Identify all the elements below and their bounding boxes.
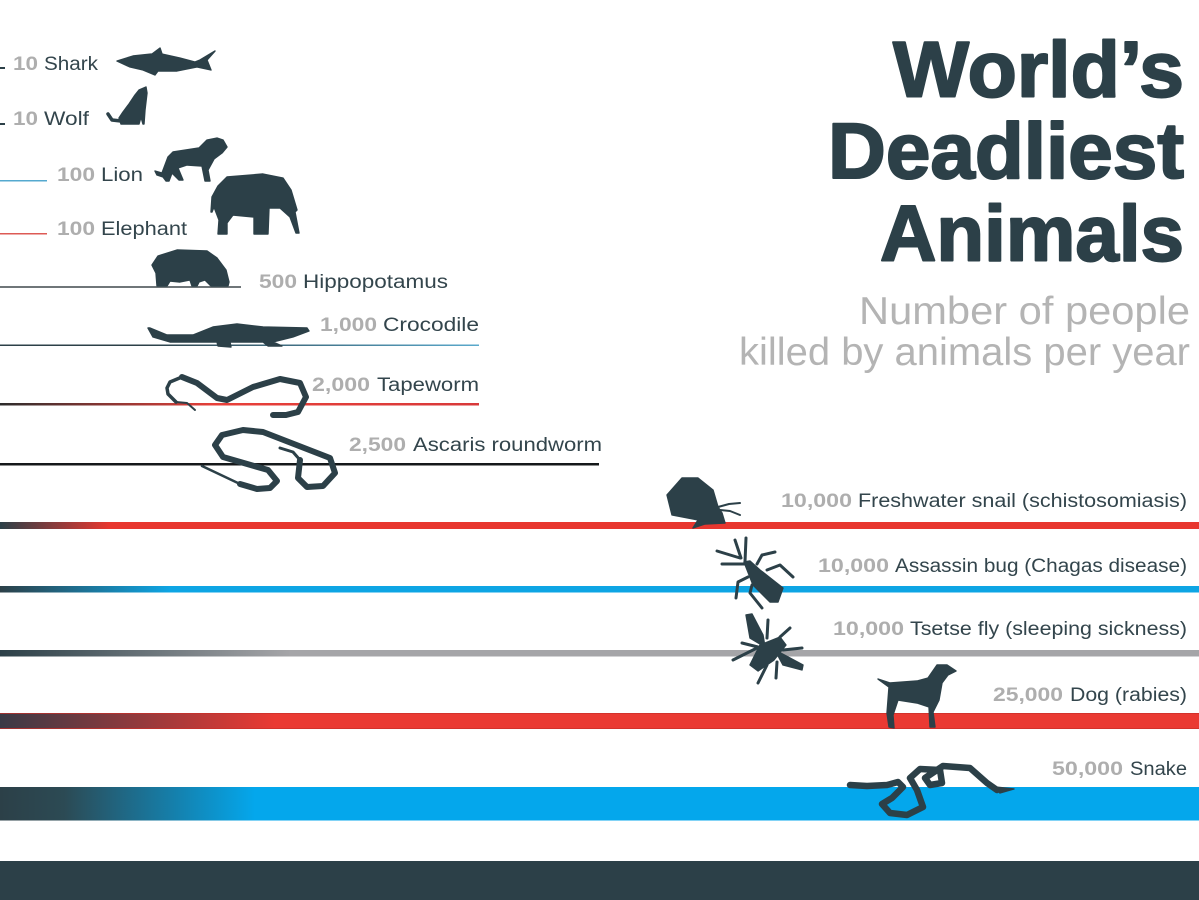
icon: elephant	[211, 174, 299, 234]
row: snake	[0, 759, 1199, 820]
icon: tsetse fly	[733, 614, 803, 683]
row: hippopotamus: 500	[259, 272, 297, 293]
row: elephant: Elephant	[101, 219, 188, 240]
row: dog: Dog (rabies)	[1070, 685, 1187, 706]
icon: wolf	[108, 87, 147, 124]
row: wolf: Wolf	[44, 109, 90, 130]
title: Animals	[880, 188, 1184, 278]
row: lion: 100	[57, 165, 95, 186]
row: dog	[0, 665, 1199, 729]
row: ascaris roundworm: 2,500	[349, 435, 406, 456]
row: assassin bug	[0, 538, 1199, 608]
subtitle	[739, 290, 1190, 374]
row: crocodile	[0, 315, 479, 347]
icon: assassin bug	[717, 538, 793, 608]
icon: tapeworm	[167, 377, 306, 415]
row: snake: Snake	[1130, 759, 1187, 780]
row: freshwater snail: Freshwater snail (schistosomiasis)	[858, 491, 1187, 512]
footer band	[0, 861, 1199, 900]
row: shark	[0, 48, 215, 75]
icon: crocodile	[148, 324, 309, 347]
row: tapeworm	[0, 375, 479, 415]
row: wolf: 10	[13, 109, 38, 130]
row: dog: 25,000	[993, 685, 1063, 706]
row: assassin bug: Assassin bug (Chagas disease)	[895, 556, 1187, 577]
row: lion	[0, 138, 227, 186]
icon: snail	[667, 478, 740, 528]
row: wolf	[0, 87, 147, 130]
icon: snake	[850, 766, 1014, 815]
row: ascaris roundworm: Ascaris roundworm	[413, 435, 602, 456]
row: freshwater snail	[0, 478, 1199, 529]
row: shark: Shark	[44, 54, 99, 75]
row: tsetse fly	[0, 614, 1199, 683]
row: lion: Lion	[101, 165, 143, 186]
subtitle: killed by animals per year	[739, 331, 1190, 374]
row: shark: 10	[13, 54, 38, 75]
row: ascaris roundworm	[0, 430, 602, 489]
icon: dog	[878, 665, 956, 728]
subtitle: Number of people	[859, 290, 1190, 333]
row: tapeworm: Tapeworm	[377, 375, 479, 396]
row: tsetse fly: 10,000	[833, 619, 904, 640]
row: hippopotamus	[0, 250, 448, 293]
row: crocodile: 1,000	[320, 315, 377, 336]
row: snake: 50,000	[1052, 759, 1123, 780]
title: World’s	[893, 24, 1184, 114]
row: assassin bug: 10,000	[818, 556, 889, 577]
row: freshwater snail: 10,000	[781, 491, 852, 512]
row: crocodile: Crocodile	[383, 315, 479, 336]
icon: ascaris roundworm	[202, 430, 335, 489]
row: elephant	[0, 174, 299, 240]
icon: lion	[155, 138, 227, 181]
row: tsetse fly: Tsetse fly (sleeping sickness)	[910, 619, 1187, 640]
icon: shark	[117, 48, 215, 75]
row: elephant: 100	[57, 219, 95, 240]
row: hippopotamus: Hippopotamus	[303, 272, 448, 293]
row: tapeworm: 2,000	[312, 375, 370, 396]
title: Deadliest	[828, 106, 1184, 195]
title	[828, 24, 1184, 278]
icon: hippopotamus	[152, 250, 229, 286]
